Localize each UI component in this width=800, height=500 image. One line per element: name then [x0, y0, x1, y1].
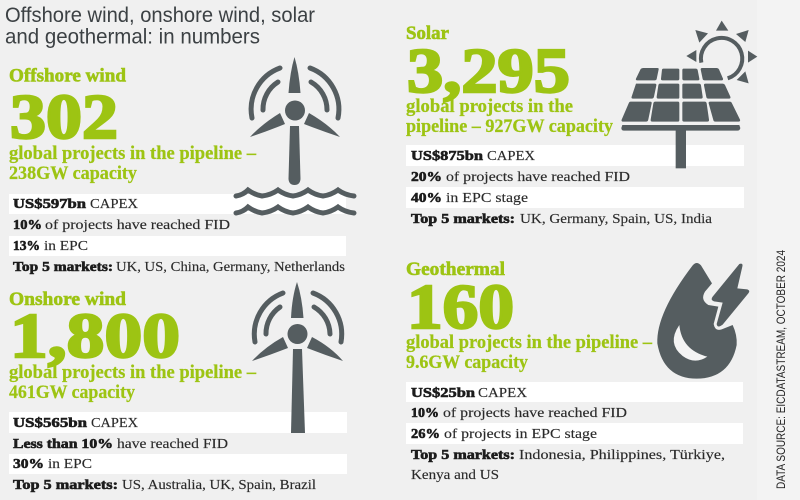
panel: solar — [406, 21, 757, 227]
stats table: solar: 40% — [411, 191, 442, 206]
stats table: offshore wind — [9, 194, 346, 275]
stats table: geothermal: 26% — [411, 427, 440, 442]
icon: offshore wind turbine — [236, 57, 354, 213]
stats table: geothermal: of projects in EPC stage — [444, 427, 597, 442]
panel: geothermal — [406, 259, 749, 483]
text: pipeline capacity: global projects in the — [406, 97, 573, 117]
stats table: onshore wind: US$565bn — [13, 416, 87, 431]
stats table: geothermal: of projects have reached FID — [443, 406, 627, 421]
panel: onshore wind — [9, 282, 347, 493]
stats table: geothermal: Kenya and US — [411, 468, 499, 483]
stats table: offshore wind: Top 5 markets: — [13, 260, 113, 275]
title: and geothermal: in numbers — [5, 26, 260, 48]
icon: geothermal drop and bolt — [657, 263, 749, 379]
data source note: DATA SOURCE: EICDATASTREAM, OCTOBER 2024 — [774, 250, 788, 489]
text: pipeline capacity — [406, 333, 653, 373]
stats table: geothermal: US$25bn — [411, 386, 475, 401]
text: pipeline capacity: 9.6GW capacity — [406, 353, 529, 373]
stats table: geothermal: 10% — [411, 406, 439, 421]
stats table: onshore wind: US, Australia, UK, Spain, Brazil — [122, 478, 316, 493]
heading: solar: Solar — [406, 23, 450, 44]
text: pipeline capacity: 461GW capacity — [9, 383, 136, 403]
stats table: onshore wind: have reached FID — [117, 437, 228, 452]
stats table: geothermal: Indonesia, Philippines, Türkiye, — [519, 448, 725, 463]
stats table: onshore wind: Top 5 markets: — [13, 478, 118, 493]
stats table: solar: US$875bn — [411, 149, 483, 164]
stats table: solar: 20% — [411, 170, 442, 185]
stats table: onshore wind: CAPEX — [91, 416, 138, 431]
stats table: solar: Top 5 markets: — [411, 212, 515, 227]
icon: solar panel and sun — [621, 21, 757, 168]
heading: onshore wind: Onshore wind — [9, 289, 126, 310]
stats table: offshore wind: UK, US, China, Germany, Netherlands — [116, 260, 345, 275]
panel: offshore wind — [9, 57, 354, 275]
text: pipeline capacity — [9, 144, 257, 184]
text: pipeline capacity — [406, 97, 614, 137]
stats table: solar — [406, 145, 744, 227]
stats table: offshore wind: 13% — [13, 239, 40, 254]
text: pipeline capacity: 238GW capacity — [9, 164, 138, 184]
number: 1,800 projects: 1,800 — [10, 301, 180, 371]
stats table: onshore wind: 30% — [13, 457, 44, 472]
title — [5, 4, 315, 48]
stats table: geothermal — [406, 382, 743, 483]
text: pipeline capacity: global projects in the pipeline – — [9, 144, 257, 164]
stats table: offshore wind: in EPC — [44, 239, 88, 254]
stats table: solar: CAPEX — [487, 149, 535, 164]
stats table: onshore wind: Less than 10% — [13, 437, 113, 452]
stats table: offshore wind: of projects have reached FID — [45, 218, 230, 233]
text: pipeline capacity: pipeline – 927GW capacity — [406, 117, 614, 137]
text: pipeline capacity — [9, 363, 257, 403]
stats table: solar: UK, Germany, Spain, US, India — [520, 212, 713, 227]
number: 302 projects: 302 — [10, 82, 118, 152]
title: Offshore wind, onshore wind, solar — [5, 4, 315, 27]
icon: onshore wind turbine — [252, 282, 343, 433]
number: 160 projects: 160 — [407, 272, 514, 342]
number: 3,295 projects: 3,295 — [407, 36, 570, 106]
heading: offshore wind: Offshore wind — [9, 66, 126, 86]
stats table: geothermal: CAPEX — [478, 386, 527, 401]
stats table: geothermal: Top 5 markets: — [411, 448, 515, 463]
text: pipeline capacity: global projects in the pipeline – — [9, 363, 257, 383]
heading: geothermal: Geothermal — [406, 259, 505, 280]
stats table: onshore wind — [9, 412, 347, 493]
stats table: solar: of projects have reached FID — [446, 170, 630, 185]
stats table: offshore wind: 10% — [13, 218, 42, 233]
text: pipeline capacity: global projects in the pipeline – — [406, 333, 653, 353]
stats table: onshore wind: in EPC — [48, 457, 92, 472]
stats table: solar: in EPC stage — [446, 191, 528, 206]
stats table: offshore wind: US$597bn — [13, 197, 86, 212]
stats table: offshore wind: CAPEX — [90, 197, 138, 212]
